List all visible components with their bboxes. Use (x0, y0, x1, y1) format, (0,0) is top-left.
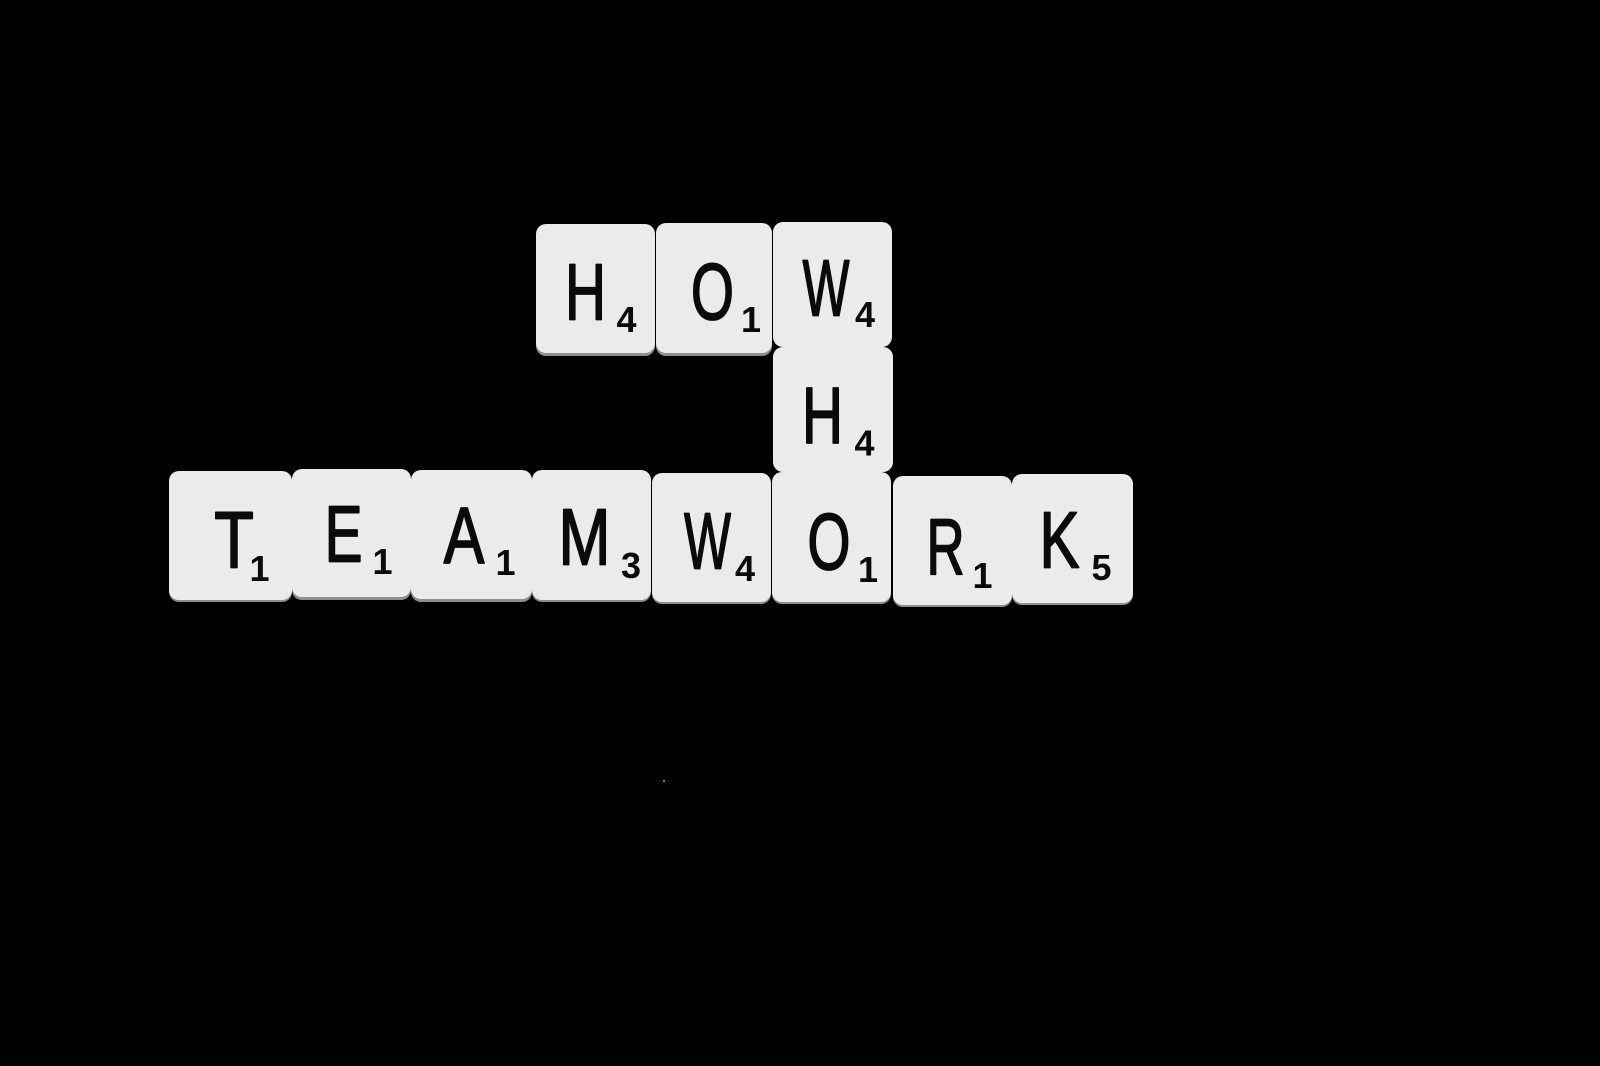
tile: O1: O (691, 247, 734, 336)
tile: R1: R (926, 504, 965, 592)
tile: T1 (169, 471, 292, 602)
tile: H4 vertical: H (802, 370, 843, 460)
tile: W4: W (684, 498, 731, 587)
tile: R1 (893, 476, 1012, 607)
tile: K5: K (1039, 495, 1080, 584)
tile: E1 (292, 469, 411, 600)
tile: T1: 1 (249, 548, 270, 589)
tile: W4 (652, 473, 771, 604)
tile: M3: 3 (621, 545, 641, 586)
tile: E1: E (325, 489, 362, 579)
tile: K5 (1012, 474, 1133, 605)
tile: R1: 1 (972, 555, 993, 596)
tile: O1 (772, 472, 891, 604)
tile: A1: 1 (495, 542, 516, 583)
tile: H4 vertical: 4 (854, 422, 875, 464)
word: HOW (536, 222, 892, 356)
tile: W4: 4 (855, 294, 875, 335)
tile: W4: W (803, 245, 850, 334)
tile: W4: 4 (735, 548, 755, 589)
tile: E1: 1 (372, 541, 393, 582)
tile: M3 (532, 470, 651, 602)
tile: A1: A (444, 492, 485, 581)
tile: O1: 1 (741, 299, 761, 340)
tile: H4 vertical (773, 347, 893, 472)
tile: O1: O (808, 497, 850, 586)
tile: M3: M (559, 493, 610, 582)
tile: H4: 4 (616, 299, 637, 340)
word: TEAMWORK (169, 469, 1133, 607)
tile: O1 (656, 223, 772, 356)
tile: H4 (536, 224, 655, 356)
tile: K5: 5 (1091, 547, 1112, 588)
tile: W4 (773, 222, 892, 347)
tile: A1 (411, 470, 532, 602)
tile: H4: H (565, 247, 606, 337)
tile: T1: T (214, 496, 254, 585)
tile: O1: 1 (858, 549, 878, 590)
word: H (vertical link) (773, 347, 893, 472)
